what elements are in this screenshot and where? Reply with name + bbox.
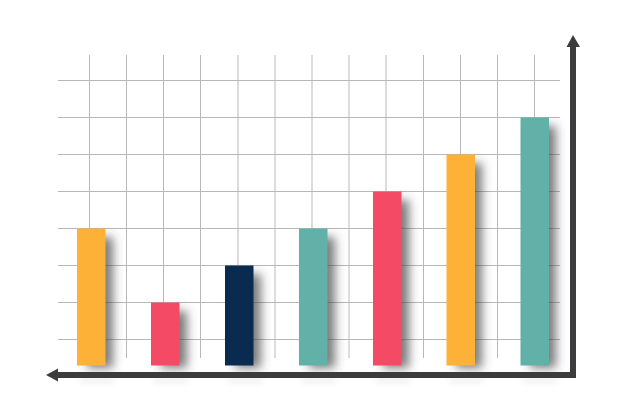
bar 6: yellow (446, 154, 475, 366)
bar 2: red (151, 302, 180, 366)
bar shadows (87, 126, 556, 368)
bar 7: teal (520, 118, 549, 366)
bar 3: navy (225, 266, 254, 366)
horizontal axis arrow (46, 368, 570, 382)
bar 1: yellow (77, 228, 106, 366)
bar 4: teal (299, 228, 328, 366)
axis shadows under bars (80, 379, 557, 382)
bar 5: red (373, 192, 402, 366)
vertical axis arrow (566, 35, 580, 378)
